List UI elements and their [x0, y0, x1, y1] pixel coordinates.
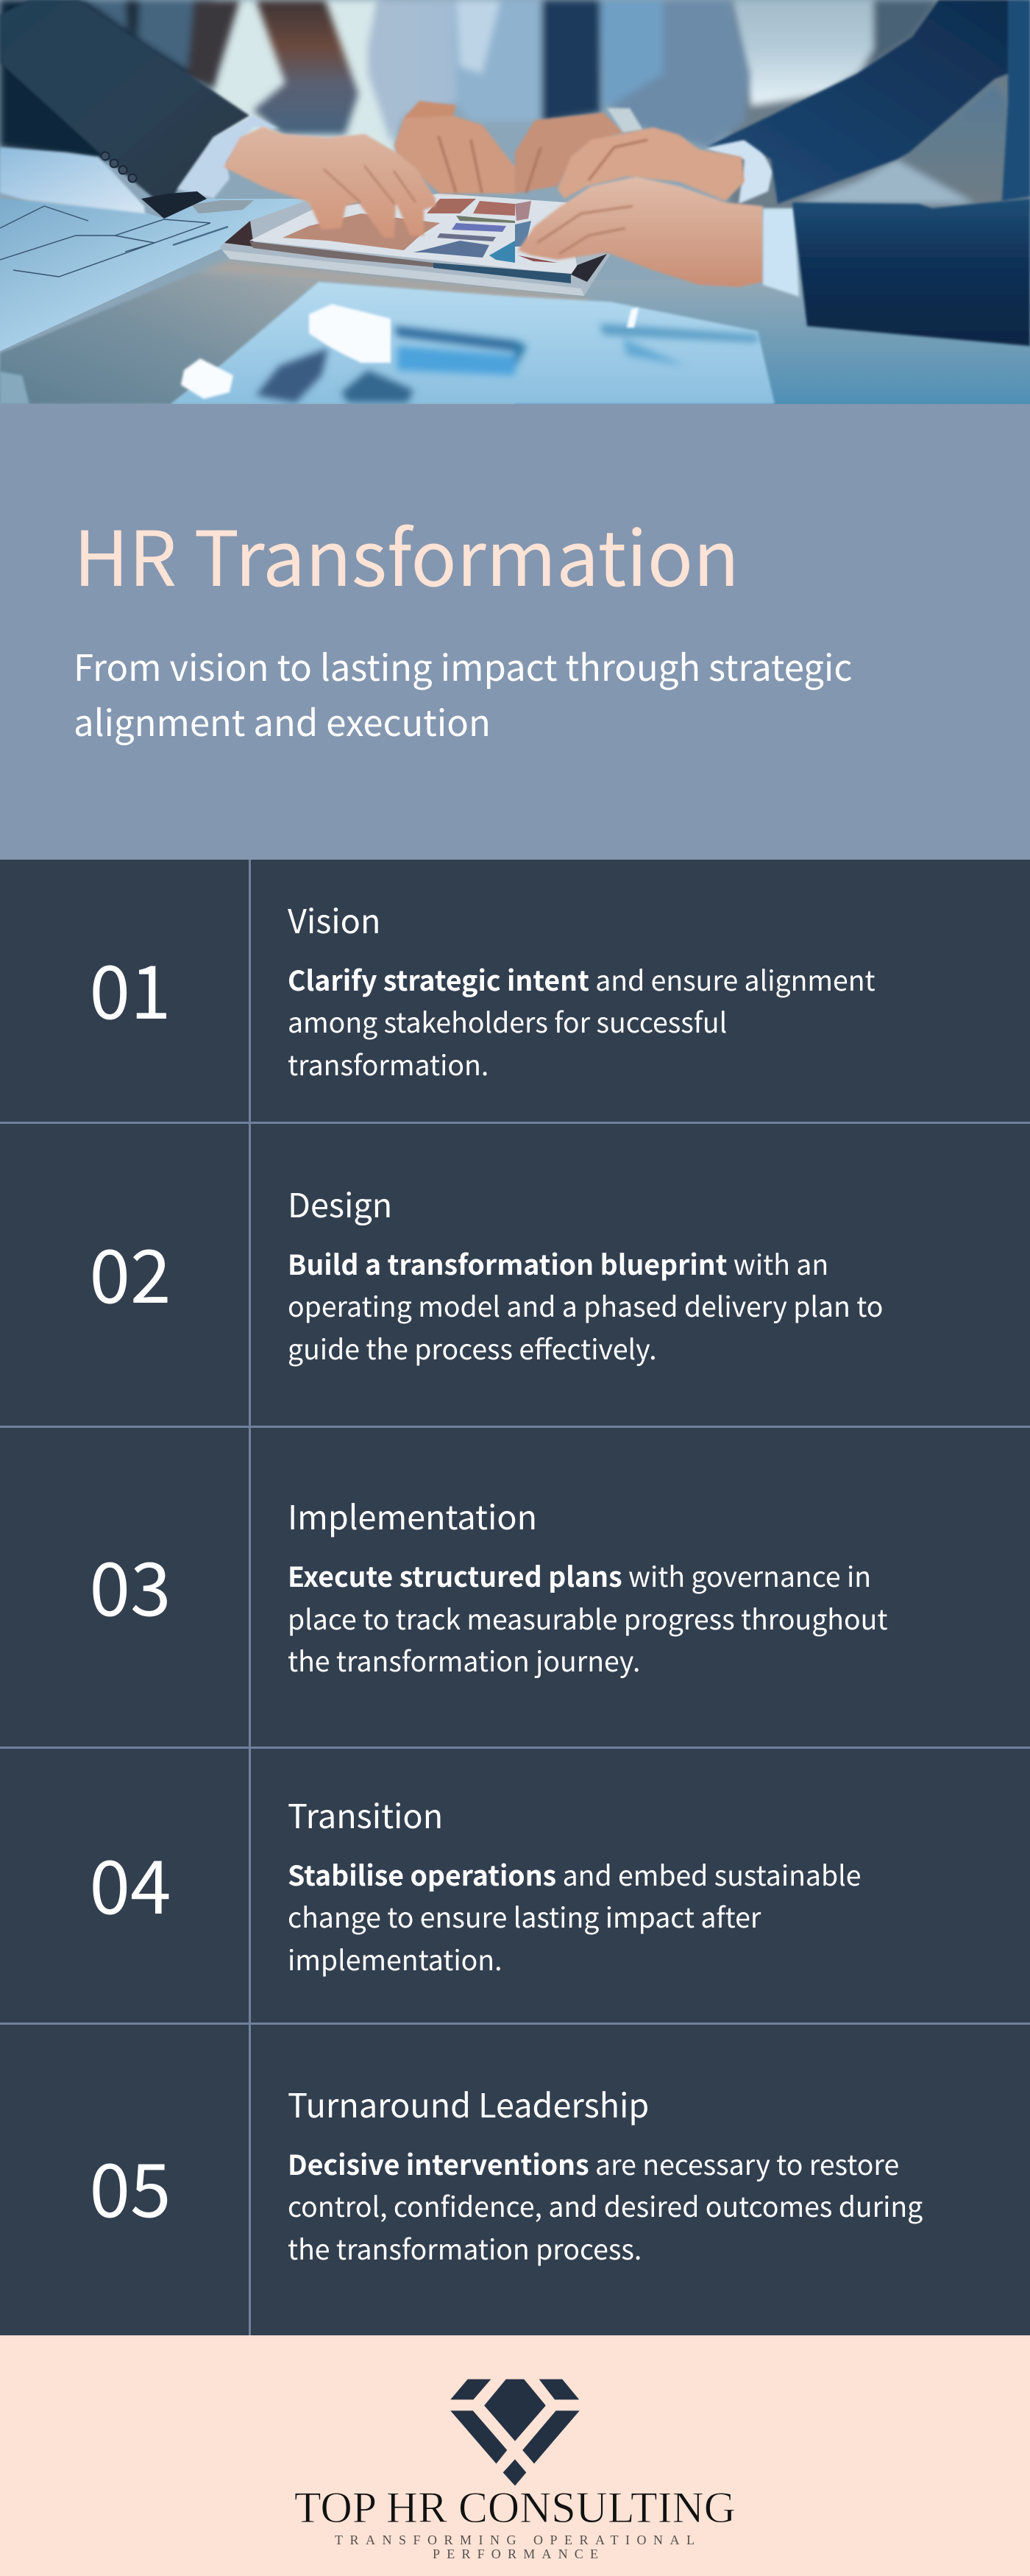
- text: transition: change to ensure lasting impact after: [288, 1896, 761, 1936]
- logo: diamond mark with company name: [294, 2379, 736, 2561]
- right cuff, upper: [706, 138, 772, 204]
- panel: step 05 turnaround leadership: [0, 2025, 1030, 2335]
- tablet: [220, 194, 611, 296]
- company name: TOP HR CONSULTING: [294, 2483, 736, 2532]
- number 05: 05: [90, 2131, 171, 2238]
- right cuff, lower: [763, 208, 799, 297]
- tablet screen tiles: [283, 199, 558, 263]
- text: design: operating model and a phased delivery plan to: [288, 1285, 883, 1325]
- number 02: [0, 1124, 251, 1426]
- number 05: [0, 2025, 251, 2335]
- number 03: [0, 1428, 251, 1747]
- text: transition: implementation.: [288, 1939, 502, 1978]
- text: implementation: place to track measurable progress throughout: [288, 1598, 887, 1638]
- sleeve buttons: [102, 152, 137, 183]
- header panel: [0, 404, 1030, 860]
- rolled white paper: [0, 147, 145, 213]
- right suit, upper sleeve: [706, 0, 1030, 204]
- number 04: [0, 1749, 251, 2023]
- panel: step 02 design: [0, 1124, 1030, 1428]
- text: design: Build a transformation blueprint with an: [288, 1243, 828, 1283]
- number 03: 03: [90, 1529, 171, 1637]
- tagline: TRANSFORMING OPERATIONAL: [335, 2533, 695, 2547]
- text: design: [288, 1179, 883, 1367]
- text: design: guide the process effectively.: [288, 1328, 657, 1367]
- text: design: Design: [288, 1179, 392, 1227]
- warm shadow band under tablet: [197, 260, 589, 309]
- tagline: PERFORMANCE: [433, 2547, 598, 2561]
- text: implementation: [288, 1491, 887, 1680]
- table surface: [0, 0, 1030, 404]
- blue table reflection: [171, 282, 775, 404]
- number 04: 04: [90, 1828, 171, 1935]
- panel: step 03 implementation: [0, 1428, 1030, 1749]
- number 01: [0, 860, 251, 1122]
- text: implementation: Implementation: [288, 1491, 537, 1539]
- text: implementation: Execute structured plans with governance in: [288, 1555, 871, 1595]
- subtitle: From vision to lasting impact through strategic: [74, 640, 852, 692]
- back person, left: [0, 0, 358, 162]
- footer panel: [0, 2335, 1030, 2576]
- text: turnaround leadership: Decisive interventions are necessary to restore: [288, 2143, 899, 2183]
- centre hands: [394, 101, 643, 194]
- text: vision: [288, 895, 876, 1083]
- hero photo: hands over a tablet on a meeting table: [0, 0, 1030, 404]
- back wall and window: [213, 0, 1030, 213]
- number 02: 02: [90, 1217, 171, 1324]
- icon: diamond: [450, 2379, 580, 2485]
- left sleeve: [0, 0, 249, 210]
- subtitle: [74, 640, 852, 746]
- text: transition: [288, 1790, 861, 1978]
- text: vision: transformation.: [288, 1044, 489, 1083]
- text: vision: Clarify strategic intent and ensure alignment: [288, 959, 876, 999]
- text: vision: among stakeholders for successful: [288, 1001, 727, 1041]
- left hand with fingers: [224, 127, 436, 238]
- text: vision: Vision: [288, 895, 380, 943]
- right suit, lower sleeve: [792, 199, 1030, 346]
- right lower hand: [518, 177, 763, 287]
- text: turnaround leadership: the transformation process.: [288, 2228, 642, 2268]
- centre person shirt, tie and sleeves: [368, 0, 750, 147]
- left cuff: [177, 116, 280, 199]
- text: turnaround leadership: [288, 2079, 923, 2268]
- text: turnaround leadership: control, confidence, and desired outcomes during: [288, 2185, 923, 2225]
- subtitle: alignment and execution: [74, 695, 491, 746]
- panel: step 01 vision: [0, 860, 1030, 1124]
- panel: step 04 transition: [0, 1749, 1030, 2025]
- text: transition: Stabilise operations and embed sustainable: [288, 1854, 861, 1894]
- sleeve flap: [141, 191, 207, 219]
- tagline: [335, 2533, 695, 2561]
- text: transition: Transition: [288, 1790, 443, 1838]
- text: implementation: the transformation journey.: [288, 1640, 640, 1680]
- right upper hand: [558, 127, 745, 201]
- white glare spots: [0, 304, 639, 404]
- table left region: [0, 272, 319, 404]
- blueprint document: [0, 199, 312, 351]
- text: turnaround leadership: Turnaround Leadership: [288, 2079, 649, 2127]
- title: HR Transformation: [74, 498, 739, 608]
- number 01: 01: [90, 933, 171, 1040]
